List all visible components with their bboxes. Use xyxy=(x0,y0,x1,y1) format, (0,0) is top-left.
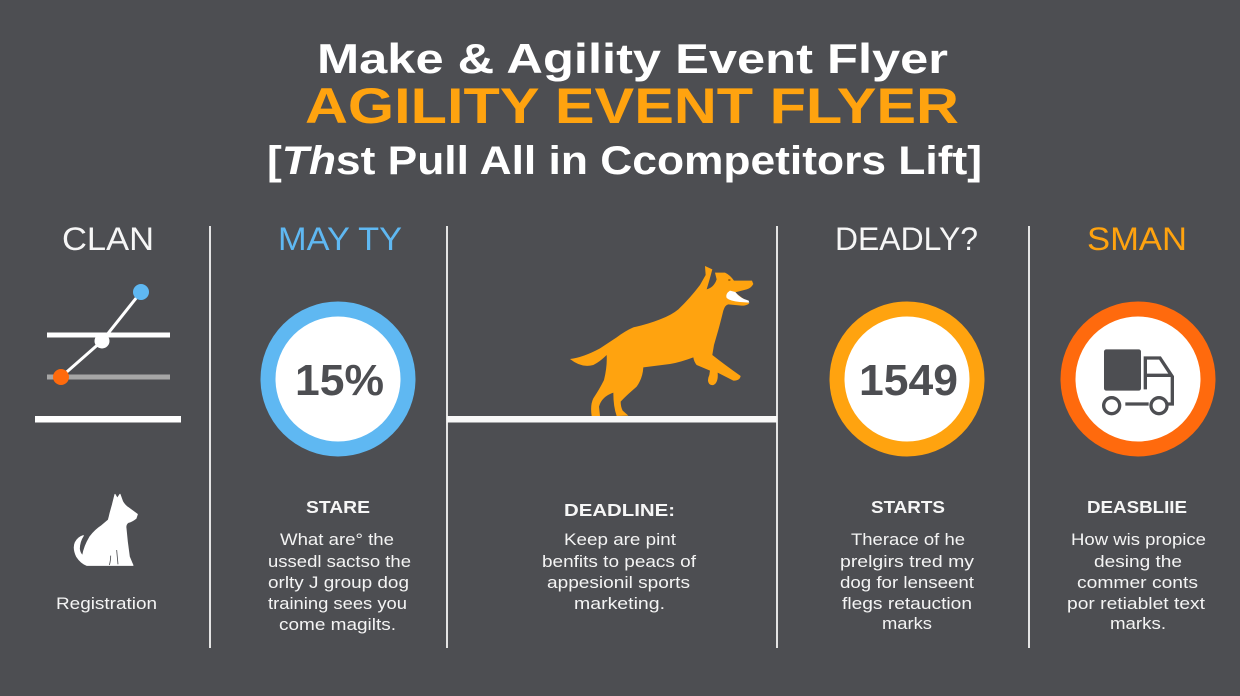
text block: stare: What are° the xyxy=(280,530,394,549)
text block: deasbliie: por retiablet text xyxy=(1067,594,1205,613)
text block: deasbliie: How wis propice xyxy=(1071,530,1206,549)
text block: starts: flegs retauction xyxy=(842,594,972,613)
title xyxy=(267,35,982,183)
text block: deadline: Keep are pint xyxy=(564,530,676,549)
heading: may ty: MAY TY xyxy=(278,221,402,257)
panel: sman xyxy=(1067,221,1208,633)
title: AGILITY EVENT FLYER xyxy=(305,78,959,134)
title: [Thst Pull All in Ccompetitors Lift] xyxy=(267,139,982,183)
text block: deadline xyxy=(542,500,696,613)
icon: truck xyxy=(1104,349,1172,414)
text block: deasbliie: commer conts xyxy=(1077,573,1198,592)
icon: sitting dog xyxy=(74,494,137,565)
stat ring: 15% xyxy=(268,309,408,449)
text block: starts xyxy=(840,497,975,633)
text block: deasbliie: desing the xyxy=(1094,552,1182,571)
text block: deasbliie xyxy=(1067,497,1206,633)
text block: deasbliie: marks. xyxy=(1110,614,1166,633)
icon: slider chart xyxy=(35,284,181,422)
text block: stare: training sees you xyxy=(268,594,407,613)
panel: clan xyxy=(35,221,181,613)
title: Make & Agility Event Flyer xyxy=(317,35,948,82)
text block: stare: STARE xyxy=(306,497,370,517)
stat ring: 1549 xyxy=(837,309,977,449)
text block: starts: STARTS xyxy=(871,497,945,517)
text block: starts: marks xyxy=(882,614,932,633)
icon: leaping dog xyxy=(570,266,753,416)
text block: deadline: appesionil sports xyxy=(547,573,690,592)
panel: deadly xyxy=(835,221,978,633)
label: registration: Registration xyxy=(56,594,157,613)
stat ring: 1549: 1549 xyxy=(859,356,958,405)
text block: deadline: benfits to peacs of xyxy=(542,552,696,571)
heading: clan: CLAN xyxy=(62,221,154,257)
panel: may ty xyxy=(268,221,411,634)
text block: stare xyxy=(268,497,411,634)
stat ring: truck xyxy=(1068,309,1208,449)
text block: starts: prelgirs tred my xyxy=(840,552,975,571)
text block: deadline: marketing. xyxy=(574,594,665,613)
stat ring: 15%: 15% xyxy=(295,356,384,405)
text block: stare: come magilts. xyxy=(279,615,396,634)
heading: deadly: DEADLY? xyxy=(835,221,978,257)
text block: stare: ussedl sactso the xyxy=(268,552,411,571)
text block: deasbliie: DEASBLIIE xyxy=(1087,497,1187,517)
panel: center dog xyxy=(447,266,777,613)
text block: starts: Therace of he xyxy=(851,530,965,549)
text block: stare: orlty J group dog xyxy=(268,573,409,592)
heading: sman: SMAN xyxy=(1087,221,1187,257)
text block: deadline: DEADLINE: xyxy=(564,500,675,520)
ground line xyxy=(447,416,777,422)
text block: starts: dog for lenseent xyxy=(840,573,974,592)
